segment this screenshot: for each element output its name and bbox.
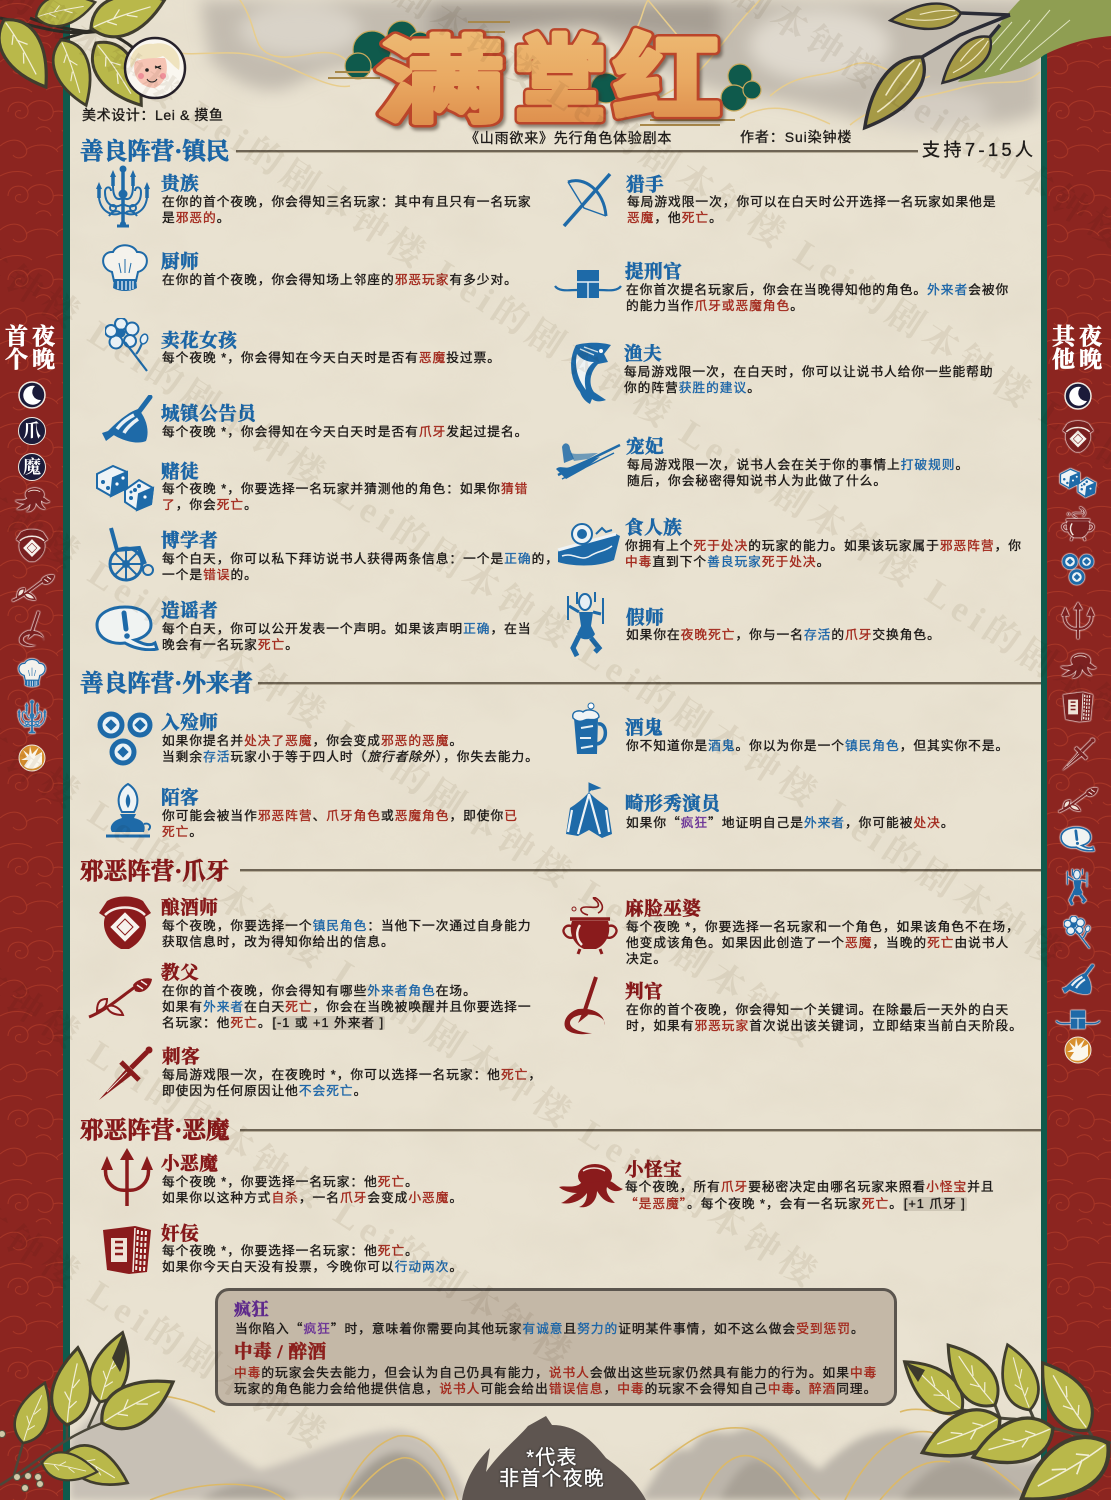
panel: rules notes — [215, 1288, 897, 1406]
ability: 中毒直到下个善良玩家死于处决。 — [625, 555, 830, 569]
other nights order icons — [1054, 382, 1102, 1064]
icon: circus tent — [566, 782, 612, 838]
icon: cauldron — [1060, 506, 1096, 542]
ability: 每个白天，你可以公开发表一个声明。如果该声明正确，在当 — [162, 622, 532, 636]
ability: 恶魔，他死亡。 — [627, 211, 723, 225]
icon: coins — [97, 710, 153, 766]
ability: 了，你会死亡。 — [162, 498, 258, 512]
heading: good townsfolk: 善良阵营·镇民 — [80, 139, 230, 165]
role name: 小怪宝 — [625, 1161, 682, 1181]
ability: “是恶魔”。每个夜晚 *，会有一名玩家死亡。[+1 爪牙 ] — [625, 1193, 966, 1212]
subtitle: 《山雨欲来》先行角色体验剧本 — [465, 130, 672, 146]
ability — [625, 538, 1022, 570]
icon: feather — [554, 441, 622, 481]
right sidebar heading: 其夜 — [1052, 324, 1106, 349]
role: brewer — [92, 893, 542, 951]
icon: fish — [568, 342, 612, 404]
title outline — [376, 3, 721, 142]
icon: speech bubble — [1058, 825, 1096, 853]
role: cannibal — [552, 516, 1022, 569]
icon: lamp — [104, 782, 152, 838]
role name: 宠妃 — [626, 438, 664, 458]
icon: wheelchair — [105, 526, 155, 582]
role name: 教父 — [161, 964, 199, 984]
role: undertaker — [92, 710, 537, 766]
icon: pillory — [1054, 1008, 1102, 1030]
role: slayer — [552, 172, 1002, 228]
ability: 在你的首个夜晚，你会得知场上邻座的邪恶玩家有多少对。 — [162, 273, 518, 287]
icon: bell — [1061, 962, 1096, 996]
rule — [236, 150, 918, 152]
ability — [162, 621, 532, 653]
ability — [626, 282, 1009, 314]
ability — [627, 194, 997, 226]
icon: jar — [97, 893, 153, 951]
left sidebar heading: 首夜 — [5, 324, 59, 349]
ability: 每个夜晚 *，你要选择一名玩家和一个角色，如果该角色不在场， — [626, 920, 1020, 934]
role name: 城镇公告员 — [161, 405, 257, 425]
ability: 你不知道你是酒鬼。你以为你是一个镇民角色，但其实你不是。 — [626, 739, 1009, 753]
right sidebar heading — [1052, 324, 1106, 372]
rule — [240, 869, 1041, 871]
ability — [162, 1243, 463, 1275]
icon: rose — [87, 977, 153, 1019]
ability: 是邪恶的。 — [162, 211, 230, 225]
note text: poison and drunk: 中毒的玩家会失去能力，但会认为自己仍具有能力，说书人会做出这些玩家仍然具有能力的行为。如果中毒 — [234, 1366, 877, 1380]
ability — [625, 1179, 995, 1212]
icon: pie — [556, 522, 622, 568]
rule — [240, 1129, 1041, 1131]
role name: 畸形秀演员 — [625, 795, 721, 815]
role: magistrate — [552, 260, 1014, 313]
ability: 死亡。 — [162, 825, 203, 839]
ability — [162, 983, 532, 1031]
role name: 造谣者 — [161, 602, 218, 622]
ability: 如果你提名并处决了恶魔，你会变成邪恶的恶魔。 — [162, 734, 463, 748]
token: sun — [18, 744, 46, 772]
role: concubine — [552, 435, 967, 488]
ability: 的能力当作爪牙或恶魔角色。 — [626, 299, 804, 313]
role name: 陌客 — [161, 789, 199, 809]
icon: rose — [10, 574, 56, 603]
ability — [162, 1174, 463, 1206]
ability: 决定。 — [626, 952, 667, 966]
ability — [162, 918, 532, 950]
role name: 小恶魔 — [161, 1155, 218, 1175]
icon: puppet — [1065, 868, 1089, 906]
ability: 如果你在夜晚死亡，你与一名存活的爪牙交换角色。 — [626, 628, 941, 642]
ability: 如果你“疯狂”地证明自己是外来者，你可能被处决。 — [626, 812, 954, 831]
icon: octopus — [557, 1163, 623, 1209]
ability — [624, 364, 994, 396]
role name: 奸佞 — [161, 1225, 199, 1245]
ability — [162, 733, 539, 765]
ability: 即使因为任何原因让他不会死亡。 — [162, 1084, 367, 1098]
role name: 厨师 — [161, 253, 199, 273]
note text: poison and drunk: 玩家的角色能力会给他提供信息，说书人可能会给出错误信息，中毒的玩家不会得知自己中毒。醉酒同理。 — [234, 1382, 877, 1396]
icon: chef hat — [16, 657, 48, 688]
token: demon: 魔 — [23, 457, 41, 477]
icon: cauldron — [562, 897, 618, 955]
icon: octopus — [14, 486, 51, 513]
ability: 在你的首个夜晚，你会得知一个关键词。在除最后一天外的白天 — [626, 1003, 1009, 1017]
ability: 每局游戏限一次，说书人会在关于你的事情上打破规则。 — [627, 458, 969, 472]
icon: jar — [1062, 420, 1094, 454]
note text: poison and drunk — [234, 1365, 877, 1397]
title text — [376, 3, 721, 142]
icon: chandelier — [96, 166, 150, 228]
role name: 卖花女孩 — [161, 332, 237, 352]
token: minion: 爪 — [23, 421, 41, 441]
icon: trident — [1060, 601, 1096, 640]
role name: 入殓师 — [161, 714, 218, 734]
heading: good outsiders: 善良阵营·外来者 — [80, 671, 253, 697]
role name: 博学者 — [161, 532, 218, 552]
role name: 渔夫 — [624, 345, 662, 365]
ability — [627, 457, 969, 489]
ability: 他变成该角色。如果因此创造了一个恶魔，当晚的死亡由说书人 — [626, 936, 1009, 950]
left sidebar heading — [5, 324, 59, 372]
role name: 假师 — [626, 609, 664, 629]
icon: crossbow — [562, 172, 612, 228]
ability: 你的阵营获胜的建议。 — [624, 381, 761, 395]
ability: 每局游戏限一次，你可以在白天时公开选择一名玩家如果他是 — [627, 195, 997, 209]
ability: 每个夜晚，所有爪牙要秘密决定由哪名玩家来照看小怪宝并且 — [625, 1180, 995, 1194]
ability: 随后，你会秘密得知说书人为此做了什么。 — [627, 474, 887, 488]
ability: 你可能会被当作邪恶阵营、爪牙角色或恶魔角色，即使你已 — [162, 809, 518, 823]
ability — [162, 808, 518, 840]
top-left leaves — [0, 0, 166, 108]
decorative clouds — [328, 21, 761, 125]
ability — [626, 1002, 1023, 1034]
ability: 名玩家：他死亡。[-1 或 +1 外来者 ] — [162, 1016, 384, 1030]
ability: 每局游戏限一次，在夜晚时 *，你可以选择一名玩家：他死亡， — [162, 1068, 542, 1082]
ability: 如果你今天白天没有投票，今晚你可以行动两次。 — [162, 1260, 463, 1274]
role: vizier — [92, 1222, 472, 1276]
note text: madness: 当你陷入“疯狂”时，意味着你需要向其他玩家有诚意且努力的证明某件事情，如不这么做会受到惩罚。 — [235, 1318, 865, 1337]
ability: 每个夜晚 *，你要选择一名玩家并猜测他的角色：如果你猜错 — [162, 482, 528, 496]
role: imp — [92, 1148, 472, 1208]
role: noble — [96, 166, 532, 228]
role name: 赌徒 — [161, 463, 199, 483]
heading: evil minions: 邪恶阵营·爪牙 — [80, 859, 230, 885]
rule — [258, 682, 1041, 684]
ability — [162, 551, 559, 583]
note title: poison and drunk: 中毒 / 醉酒 — [234, 1343, 327, 1363]
ability: 获取信息时，改为得知你给出的信息。 — [162, 935, 395, 949]
icon: pillory — [553, 268, 623, 300]
ability: 每局游戏限一次，在白天时，你可以让说书人给你一些能帮助 — [624, 365, 994, 379]
ability — [626, 919, 1020, 967]
role: fisherman — [552, 342, 997, 404]
icon: judge — [18, 610, 45, 648]
ability: 在你的首个夜晚，你会得知有哪些外来者角色在场。 — [162, 984, 477, 998]
token: sun — [1064, 1036, 1092, 1064]
role name: 食人族 — [625, 519, 682, 539]
avatar — [124, 36, 186, 100]
role: drunk — [552, 702, 1012, 758]
role: pit-hag — [552, 897, 1014, 967]
icon: book — [101, 1224, 153, 1276]
left red sidebar — [0, 0, 70, 1500]
icon: brush and ink circle — [562, 975, 608, 1037]
icon: chef hat — [100, 243, 150, 293]
token: moon — [1064, 382, 1092, 410]
right sidebar heading: 他晚 — [1052, 347, 1106, 372]
icon: book — [1062, 690, 1094, 724]
credit: art design: 美术设计：Lei & 摸鱼 — [82, 107, 224, 123]
ability: 你拥有上个死于处决的玩家的能力。如果该玩家属于邪恶阵营，你 — [625, 539, 1022, 553]
role: lil monsta — [552, 1158, 1012, 1212]
role: mutant — [552, 782, 957, 838]
icon: octopus — [1060, 652, 1098, 680]
token: moon — [18, 381, 46, 409]
ability: 每个夜晚，你要选择一个镇民角色：当他下一次通过自身能力 — [162, 919, 532, 933]
icon: rose — [1057, 786, 1099, 814]
ability: 如果你以这种方式自杀，一名爪牙会变成小恶魔。 — [162, 1191, 463, 1205]
ability: 在你的首个夜晚，你会得知三名玩家：其中有且只有一名玩家 — [162, 195, 532, 209]
role name: 麻脸巫婆 — [625, 900, 701, 920]
role: judge — [552, 975, 1022, 1037]
title logo — [328, 10, 762, 135]
icon: dice — [95, 464, 155, 512]
top-right leaves and buds — [862, 0, 1111, 130]
ability: 每个白天，你可以私下拜访说书人获得两条信息：一个是正确的， — [162, 552, 559, 566]
first night order icons — [10, 381, 56, 772]
role: gambler — [92, 460, 537, 512]
left sidebar heading: 个晚 — [5, 347, 59, 372]
icon: dagger — [1062, 737, 1096, 772]
icon: jar — [15, 528, 49, 563]
role name: 提刑官 — [625, 263, 682, 283]
role: assassin — [92, 1045, 547, 1103]
footnote — [470, 1448, 634, 1490]
footnote: 非首个夜晚 — [499, 1468, 605, 1490]
bottom-left leaves — [0, 1330, 176, 1492]
role: savant — [92, 526, 552, 582]
role: flower girl — [92, 318, 502, 374]
note title: madness: 疯狂 — [234, 1300, 269, 1319]
role name: 判官 — [625, 983, 663, 1003]
icon: trident — [101, 1148, 153, 1208]
icon: flower — [1062, 914, 1092, 950]
ability: 当剩余存活玩家小于等于四人时（旅行者除外），你失去能力。 — [162, 750, 539, 764]
token: minion — [18, 417, 46, 445]
role name: 猎手 — [626, 176, 664, 196]
role: godfather — [87, 961, 532, 1031]
right red sidebar — [1041, 36, 1111, 1500]
icon: beer mug — [571, 702, 609, 758]
ability: 晚会有一名玩家死亡。 — [162, 638, 299, 652]
author: 作者：Sui染钟楼 — [740, 129, 852, 145]
icon: bell — [100, 395, 154, 445]
role: town crier — [92, 395, 532, 445]
ability — [162, 481, 528, 513]
icon: dice — [1058, 467, 1098, 499]
icon: coins — [1060, 552, 1096, 586]
ability: 每个夜晚 *，你要选择一名玩家：他死亡。 — [162, 1244, 419, 1258]
role name: 酿酒师 — [161, 899, 218, 919]
footnote: *代表 — [526, 1447, 578, 1469]
ability: 每个夜晚 *，你会得知在今天白天时是否有爪牙发起过提名。 — [162, 425, 528, 439]
ink silhouette — [455, 1410, 655, 1500]
ability: 如果有外来者在白天死亡，你会在当晚被唤醒并且你要选择一 — [162, 1000, 532, 1014]
icon: chandelier — [16, 698, 48, 735]
role: puppet master — [552, 592, 942, 660]
bottom-right leaves — [902, 1342, 1111, 1500]
icon: puppet — [565, 592, 609, 660]
role: chef — [102, 244, 518, 291]
ability — [162, 195, 532, 225]
role name: 贵族 — [161, 175, 199, 195]
ability: 在你首次提名玩家后，你会在当晚得知他的角色。外来者会被你 — [626, 283, 1009, 297]
token: demon — [18, 453, 46, 481]
role: stranger — [92, 782, 537, 838]
player count: 支持7-15人 — [922, 140, 1037, 160]
ability: 时，如果有邪恶玩家首次说出该关键词，立即结束当前白天阶段。 — [626, 1019, 1023, 1033]
role: gossip — [92, 599, 537, 653]
role name: 酒鬼 — [625, 719, 663, 739]
heading: evil demons: 邪恶阵营·恶魔 — [80, 1118, 230, 1144]
ability: 每个夜晚 *，你会得知在今天白天时是否有恶魔投过票。 — [162, 351, 501, 365]
role name: 刺客 — [162, 1048, 200, 1068]
icon: speech bubble — [95, 605, 161, 651]
icon: flower — [105, 318, 151, 374]
ability: 每个夜晚 *，你要选择一名玩家：他死亡。 — [162, 1175, 419, 1189]
ability — [162, 1067, 542, 1099]
ability: 一个是错误的。 — [162, 568, 258, 582]
icon: dagger — [97, 1046, 153, 1102]
